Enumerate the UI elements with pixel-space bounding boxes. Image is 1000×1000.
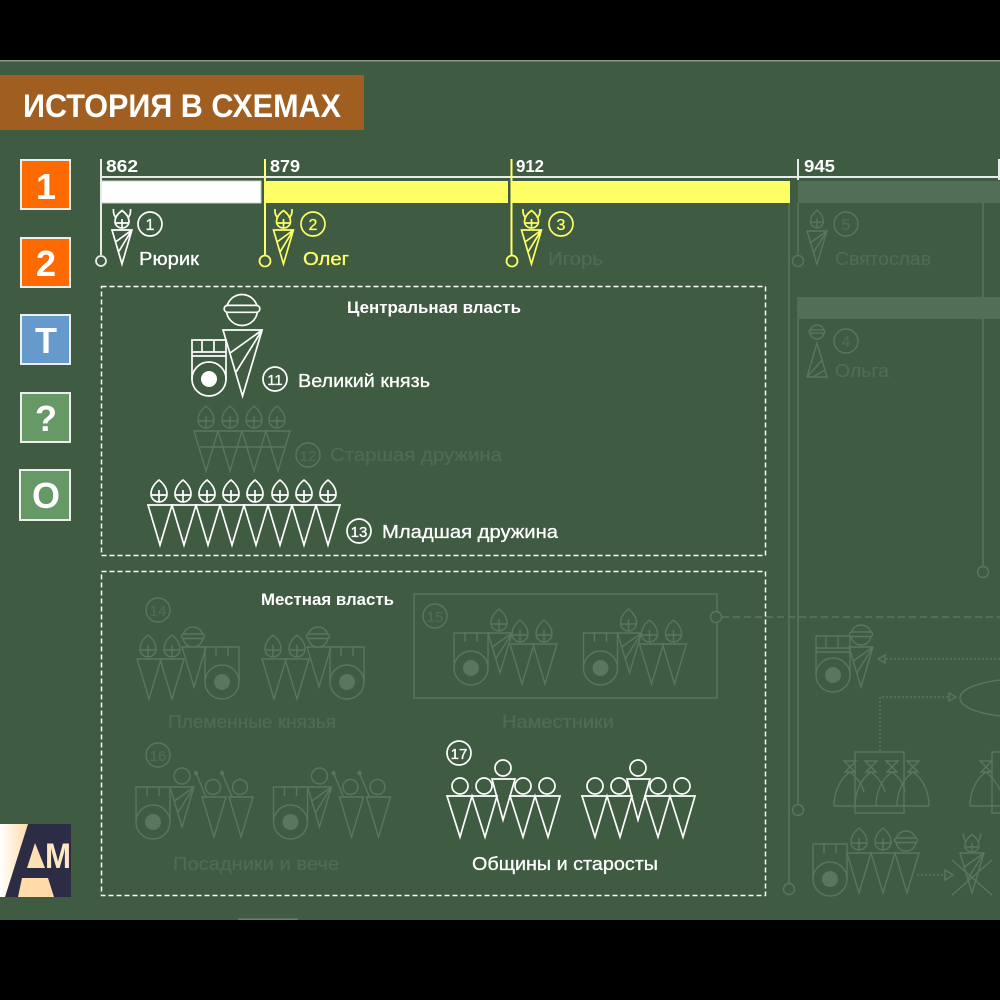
tribal princes: Племенные князья (168, 712, 336, 732)
button O: О (32, 475, 60, 516)
posadniks and veche: Посадники и вече (173, 854, 339, 874)
logo (0, 824, 71, 897)
panel: central power (102, 286, 766, 556)
ruler: Игорь (522, 209, 603, 269)
period bars (101, 181, 1000, 203)
communities and elders: 17 (451, 746, 467, 763)
ruler: Игорь: Игорь (548, 249, 603, 269)
button O (20, 470, 70, 520)
communities and elders: Общины и старосты (472, 854, 658, 874)
year labels: 945 (804, 156, 835, 176)
logo: М (45, 837, 71, 876)
panel: local power (102, 572, 766, 896)
ruler: Игорь: 3 (557, 217, 566, 234)
governors (414, 594, 722, 732)
olga period bar (797, 297, 1000, 319)
tribal princes (137, 598, 364, 732)
ruler: Ольга (807, 325, 890, 381)
ruler: Олег: Олег (303, 249, 349, 269)
top edge line (0, 60, 1000, 62)
posadniks and veche: 16 (150, 748, 166, 765)
button 1: 1 (36, 166, 56, 207)
governors: 15 (427, 609, 443, 626)
tribute bags (834, 752, 1000, 813)
ruler: Ольга: 4 (842, 334, 851, 351)
ruler: Ольга: Ольга (835, 361, 890, 381)
senior retinue (194, 406, 503, 471)
ruler: Олег (274, 209, 349, 269)
button 2 (21, 238, 70, 287)
communities and elders (447, 741, 695, 874)
prince with retinue (813, 828, 919, 896)
axis line (101, 176, 1000, 178)
title banner (0, 75, 364, 130)
senior retinue: 12 (300, 448, 316, 465)
year labels (106, 156, 835, 176)
grand prince (192, 294, 430, 396)
ruler: Святослав: Святослав (835, 249, 931, 269)
crossed ruler (952, 833, 992, 895)
junior retinue: Младшая дружина (382, 522, 559, 542)
heading: local power: Местная власть (261, 591, 394, 609)
dotted arrow left (878, 655, 1000, 663)
navigation buttons (20, 160, 70, 520)
junior retinue (148, 480, 559, 545)
ruler: Святослав (807, 210, 931, 269)
ruler: Рюрик: 1 (146, 217, 155, 234)
timeline (96, 156, 1000, 266)
assembly ellipse (960, 679, 1000, 717)
year labels: 912 (516, 156, 544, 176)
tick lines (100, 159, 102, 255)
grand prince: 11 (267, 372, 283, 389)
year labels: 879 (270, 156, 300, 176)
heading: central power: Центральная власть (347, 299, 521, 317)
grand prince: Великий князь (298, 371, 430, 391)
faded timeline connectors (722, 203, 1000, 894)
button question (21, 393, 70, 442)
dotted arrow to crossed ruler (917, 870, 953, 880)
button T (21, 315, 70, 364)
button 2: 2 (36, 243, 56, 284)
faded scheme: right side (813, 625, 1000, 896)
junior retinue: 13 (351, 524, 367, 541)
button T: Т (35, 320, 57, 361)
ruler: Святослав: 5 (842, 217, 851, 234)
ruler: Рюрик (112, 209, 199, 269)
prince with shield (816, 625, 873, 692)
ruler: Олег: 2 (309, 217, 318, 234)
bottom edge strip (238, 918, 298, 920)
title banner: ИСТОРИЯ В СХЕМАХ (23, 88, 342, 124)
governors: Наместники (502, 712, 614, 732)
senior retinue: Старшая дружина (330, 445, 503, 465)
button 1 (21, 160, 70, 209)
year labels: 862 (106, 156, 138, 176)
tribal princes: 14 (150, 603, 166, 620)
posadniks and veche (136, 743, 390, 874)
button question: ? (35, 398, 57, 439)
dotted arrow up and right (880, 693, 956, 751)
ruler: Рюрик: Рюрик (139, 249, 199, 269)
